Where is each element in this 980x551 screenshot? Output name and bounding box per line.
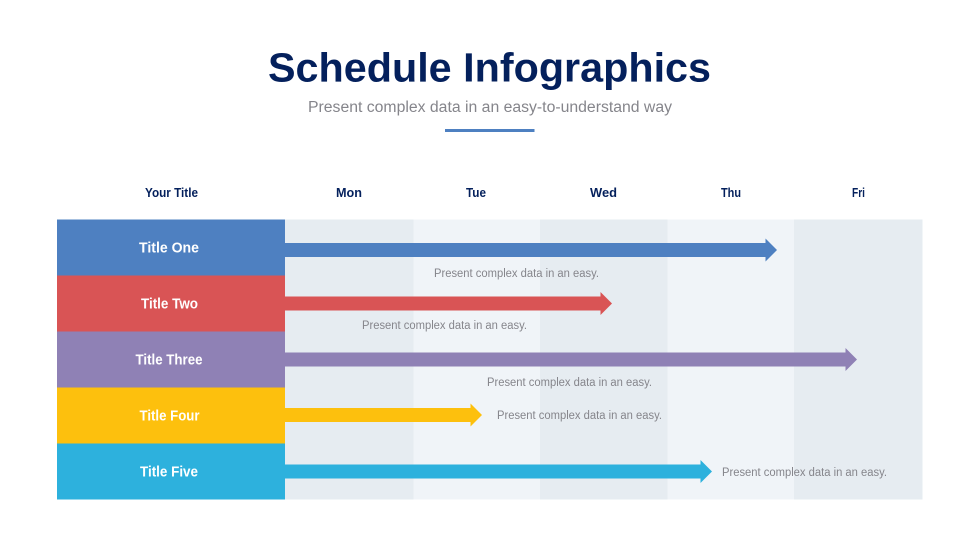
arrow: Title Four xyxy=(285,404,482,426)
row: Title One: Title One xyxy=(139,240,199,256)
column headers: Fri xyxy=(852,186,865,200)
description: Title Two: Present complex data in an easy. xyxy=(362,320,527,332)
description: Title One: Present complex data in an easy. xyxy=(434,268,599,280)
row: Title Four xyxy=(57,388,285,444)
row: Title Two xyxy=(57,276,285,332)
arrow: Title Five xyxy=(285,460,712,483)
column headers: Tue xyxy=(466,186,486,200)
column headers: Thu xyxy=(721,186,741,200)
arrow: Title One xyxy=(285,238,777,262)
schedule grid background xyxy=(285,220,922,500)
column headers xyxy=(145,186,865,200)
column headers: Wed xyxy=(590,186,617,200)
subtitle: Present complex data in an easy-to-understand way xyxy=(308,99,672,116)
column headers: Your Title xyxy=(145,186,198,200)
description: Title Three: Present complex data in an easy. xyxy=(487,377,652,389)
column headers: Mon xyxy=(336,186,362,200)
description: Title Four: Present complex data in an easy. xyxy=(497,410,662,422)
arrow: Title Two xyxy=(285,292,612,315)
description: Title Five: Present complex data in an easy. xyxy=(722,467,887,479)
title: Schedule Infographics xyxy=(268,44,711,90)
row: Title One xyxy=(57,220,285,276)
row: Title Five xyxy=(57,444,285,500)
row: Title Four: Title Four xyxy=(140,408,200,424)
row: Title Three: Title Three xyxy=(136,352,202,368)
title underline xyxy=(445,129,534,132)
row: Title Three xyxy=(57,332,285,388)
row: Title Two: Title Two xyxy=(141,296,198,312)
row: Title Five: Title Five xyxy=(140,464,198,480)
arrow: Title Three xyxy=(285,348,857,371)
